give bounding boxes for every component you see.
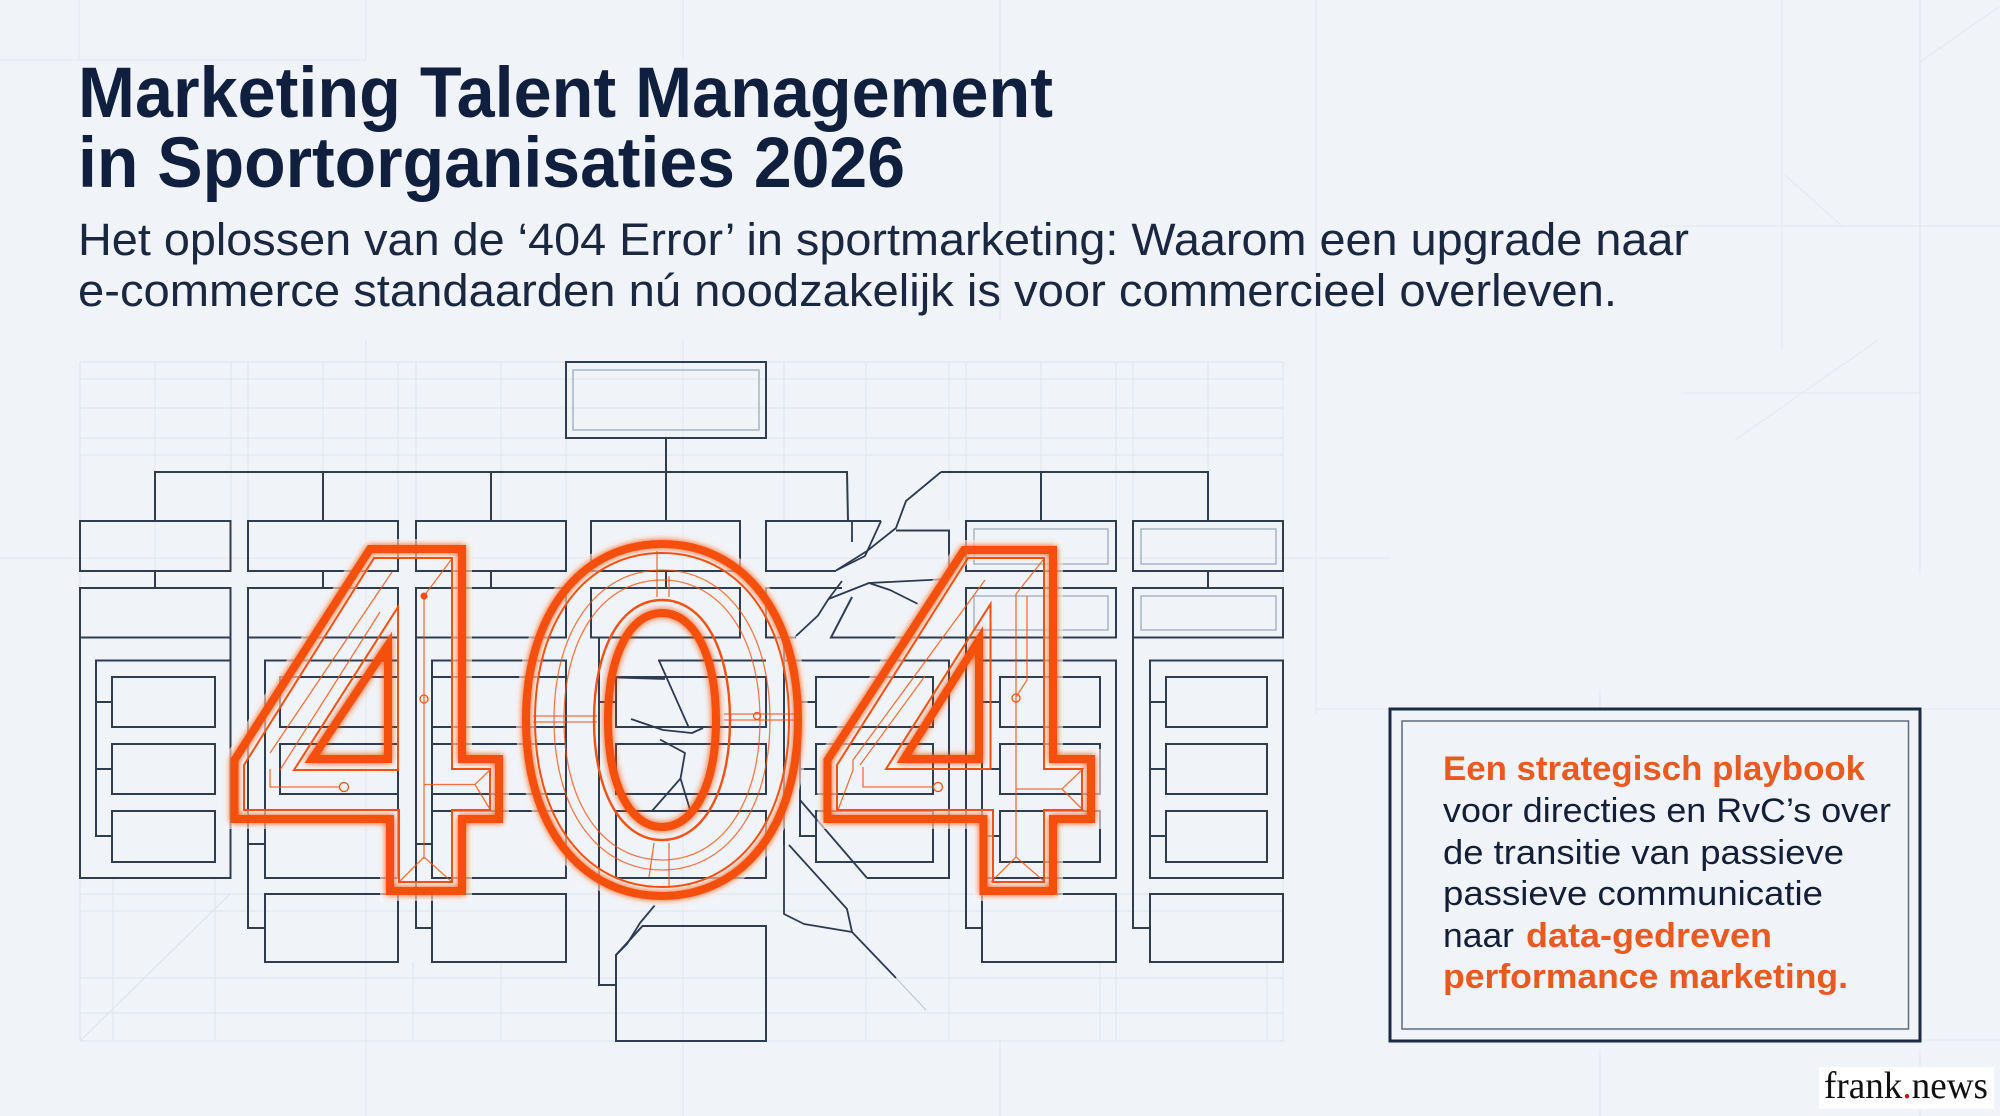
column 4 [591, 521, 766, 1041]
column 7 [1133, 521, 1283, 962]
column 1 [80, 521, 230, 878]
callout: playbook: de transitie van passieve [1443, 834, 1844, 872]
connectors [155, 438, 1208, 588]
subtitle: e-commerce standaarden nú noodzakelijk is voor commercieel overleven. [78, 265, 1617, 316]
callout: playbook: Een strategisch playbook [1443, 750, 1866, 788]
logo: frank.news: frank.news [1824, 1065, 1988, 1107]
digit 0 [526, 544, 798, 896]
title [78, 54, 1053, 203]
cracks [616, 472, 949, 1010]
title: Marketing Talent Management [78, 54, 1053, 133]
callout: playbook: performance marketing. [1443, 958, 1848, 996]
callout: playbook [1390, 709, 1920, 1041]
callout: playbook: voor directies en RvC’s over [1443, 792, 1891, 830]
title: in Sportorganisaties 2026 [78, 124, 905, 203]
callout: playbook: passieve communicatie [1443, 875, 1823, 913]
column 2 [248, 521, 398, 962]
first digit 4 [234, 549, 499, 891]
column 3 [416, 521, 566, 962]
second digit 4 [828, 550, 1091, 891]
callout: playbook: data-gedreven [1526, 917, 1772, 955]
top box [566, 362, 766, 438]
subtitle: Het oplossen van de ‘404 Error’ in sportmarketing: Waarom een upgrade naar [78, 214, 1689, 265]
column 6 [966, 521, 1116, 962]
callout: playbook: naar [1443, 917, 1514, 955]
big 404 [234, 544, 1091, 896]
subtitle [78, 214, 1689, 316]
column 5 cracked [766, 521, 966, 878]
chart: organisation chart [80, 362, 1283, 1041]
